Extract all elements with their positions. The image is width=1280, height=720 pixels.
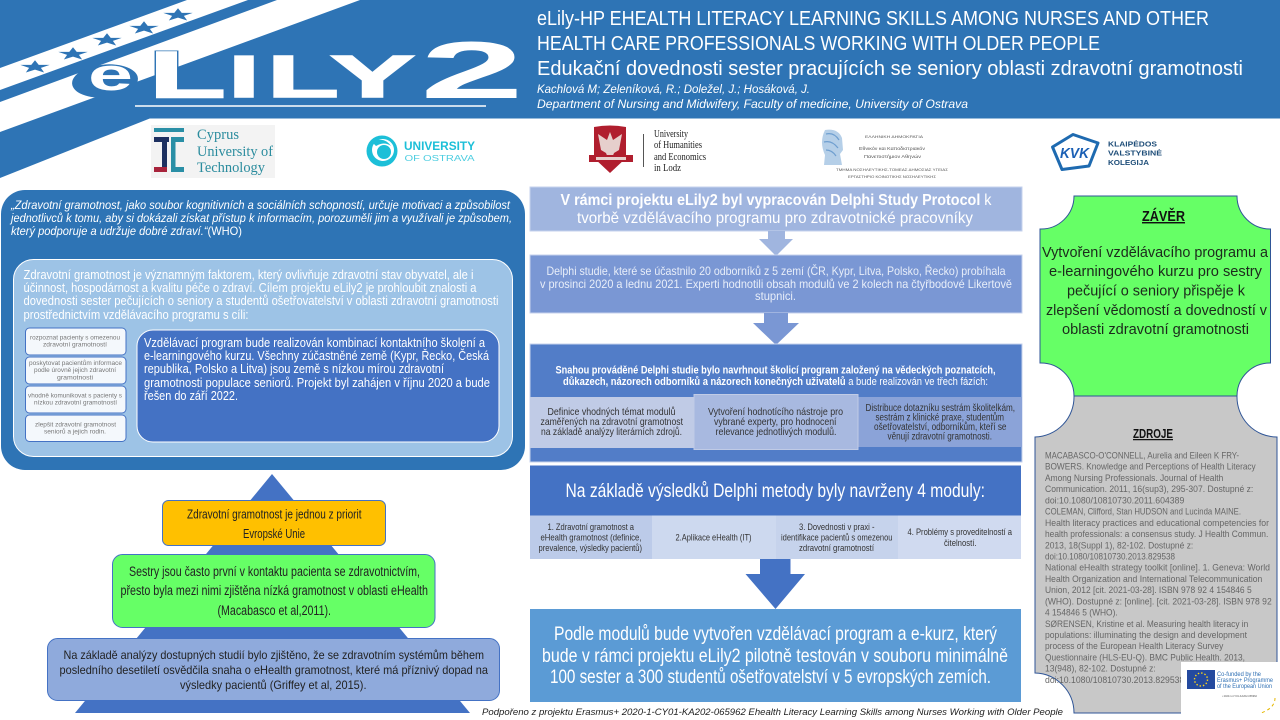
wordmark: L bbox=[267, 44, 339, 110]
pyramid level: nurses: (Macabasco et al,2011). bbox=[218, 603, 331, 618]
programme description: e-learningového kurzu. Všechny zúčastněné země (Kypr, Řecko, Česká bbox=[144, 348, 489, 363]
goal box 4: seniorů a jejich rodin. bbox=[44, 428, 106, 436]
phase 2 bbox=[694, 394, 858, 450]
panel: pilot testing: bude v rámci projektu eLily2 pilotně testován v souboru minimálně bbox=[542, 645, 1008, 667]
logo: Erasmus+ co-funding: of the European Union bbox=[1217, 683, 1272, 690]
module 3: 3. Dovednosti v praxi - bbox=[799, 522, 874, 533]
phase 3 bbox=[858, 397, 1022, 447]
phase 1: Definice vhodných témat modulů bbox=[548, 406, 676, 418]
title block: HEALTH CARE PROFESSIONALS WORKING WITH OLDER PEOPLE bbox=[537, 33, 1100, 55]
goal box 3: vhodně komunikovat s pacienty s bbox=[28, 392, 123, 400]
logo: Erasmus+ co-funding bbox=[1181, 662, 1280, 714]
module 1: 1. Zdravotní gramotnost a bbox=[548, 522, 635, 533]
logo: University of Ostrava: OF OSTRAVA bbox=[404, 154, 475, 163]
programme description: gramotnosti populace seniorů. Projekt byl zahájen v říjnu 2020 a bude bbox=[144, 376, 490, 390]
panel: project aims bbox=[14, 260, 512, 456]
references list: populations: illuminating the design and development bbox=[1045, 630, 1247, 641]
module 2 bbox=[652, 516, 776, 559]
panel: training programme phases bbox=[530, 344, 1022, 462]
panel: four modules: Na základě výsledků Delphi metody byly navrženy 4 moduly: bbox=[566, 480, 985, 502]
logo: National and Kapodistrian University of Athens: Πανεπιστήμιον Αθηνών bbox=[864, 153, 922, 159]
WHO quote bbox=[9, 198, 512, 238]
logo: National and Kapodistrian University of Athens: Εθνικόν και Καποδιστριακόν bbox=[859, 145, 926, 151]
references list: Union, 2012 [cit. 2021-03-28]. ISBN 978 92 4 154846 5 bbox=[1045, 585, 1252, 596]
aims text: prostřednictvím vzdělávacího programu s cíli: bbox=[24, 308, 248, 322]
logo: KVK Klaipedos valstybine kolegija: VALSTYBINĖ bbox=[1108, 148, 1162, 158]
panel: Delphi protocol: V rámci projektu eLily2 byl vypracován Delphi Study Protocol k bbox=[560, 192, 992, 209]
references list: doi:10.1080/10810730.2011.604389 bbox=[1045, 495, 1184, 506]
references list: 2013, 18(Suppl 1), 82-102. Dostupné z: bbox=[1045, 540, 1193, 551]
logo: University of Humanities and Economics in Lodz: and Economics bbox=[654, 151, 706, 163]
programme description: republika, Polsko a Litva) jsou země s nízkou mírou zdravotní bbox=[144, 362, 444, 376]
panel: pilot testing bbox=[530, 609, 1021, 702]
references list: Communication. 2011, 16(sup3), 295-307. Dostupné z: bbox=[1045, 484, 1253, 495]
phase 1 bbox=[530, 397, 694, 448]
logo: KVK Klaipedos valstybine kolegija: KVK bbox=[1060, 145, 1090, 162]
panel: Delphi protocol: tvorbě vzdělávacího programu pro zdravotnické pracovníky bbox=[577, 210, 973, 227]
references list: MACABASCO-O'CONNELL, Aurelia and Eileen K FRY- bbox=[1045, 450, 1239, 462]
programme description: řešen do září 2022. bbox=[144, 389, 238, 403]
wordmark: L bbox=[149, 38, 226, 112]
panel: pilot testing: 100 sester a 300 studentů ošetřovatelství v 5 evropských zemích. bbox=[550, 666, 991, 688]
panel: Delphi study: stupnici. bbox=[755, 289, 796, 303]
references list: Health Organization and International Telecommunication bbox=[1045, 574, 1262, 585]
references list: 13(948), 82-102. Dostupné z: bbox=[1045, 664, 1156, 675]
programme description bbox=[137, 330, 499, 442]
aims text: Zdravotní gramotnost je významným faktorem, který ovlivňuje zdravotní stav obyvatel, ale i bbox=[24, 268, 474, 282]
references list: Among Nursing Professionals. Journal of Health bbox=[1045, 473, 1223, 484]
logo: KVK Klaipedos valstybine kolegija bbox=[1052, 134, 1162, 170]
references list: doi:10.1080/10810730.2013.829538 bbox=[1045, 675, 1184, 686]
programme description: Vzdělávací program bude realizován kombinací kontaktního školení a bbox=[144, 336, 485, 350]
arrow 3 bbox=[746, 559, 805, 609]
goal box 4 bbox=[26, 415, 126, 442]
icon: EU flag bbox=[1187, 670, 1215, 689]
references list: 4 154846 5 (WHO). bbox=[1045, 608, 1118, 619]
conclusion text: e-learningového kurzu pro sestry bbox=[1049, 263, 1262, 280]
WHO quote: jednotlivců k tomu, aby si dokázali získat přístup k informacím, porozuměli jim a využívali je způsobem, bbox=[9, 211, 512, 225]
logo: KVK Klaipedos valstybine kolegija: KLAIPĖDOS bbox=[1108, 140, 1157, 148]
pyramid bbox=[48, 474, 500, 713]
conclusion text: pečující o seniory přispěje k bbox=[1067, 282, 1245, 300]
references list: COLEMAN, Clifford, Stan HUDSON and Lucinda MAINE. bbox=[1045, 507, 1241, 518]
wordmark: Y bbox=[330, 44, 415, 110]
logo: Cyprus University of Technology: Technology bbox=[197, 160, 266, 176]
references list bbox=[1045, 450, 1272, 686]
module 1 bbox=[530, 516, 652, 559]
module 4: 4. Problémy s proveditelností a bbox=[908, 527, 1013, 538]
title block: Edukační dovednosti sester pracujících se seniory oblasti zdravotní gramotnosti bbox=[537, 58, 1243, 80]
module 4 bbox=[898, 516, 1021, 559]
phase 3: sestrám z klinické praxe, studentům bbox=[876, 412, 1004, 424]
icon: five stars bbox=[20, 8, 193, 73]
logo: National and Kapodistrian University of Athens: ΕΛΛΗΝΙΚΗ ΔΗΜΟΚΡΑΤΙΑ bbox=[865, 135, 924, 139]
logo: Erasmus+ co-funding: Co-funded by the bbox=[1217, 671, 1262, 678]
logo: University of Humanities and Economics in Lodz: in Lodz bbox=[654, 162, 681, 174]
logo: National and Kapodistrian University of Athens: ΤΜΗΜΑ ΝΟΣΗΛΕΥΤΙΚΗΣ-ΤΟΜΕΑΣ ΔΗΜΟΣΙΑΣ ΥΓΕΙΑΣ bbox=[836, 167, 949, 172]
panel: training programme phases: důkazech, názorech odborníků a názorech konečných uživatelů a bude realizován ve třech fázích: bbox=[563, 376, 988, 388]
header banner bbox=[0, 0, 1280, 178]
phase 3: ošetřovatelství, odborníkům, kteří se bbox=[874, 421, 1007, 433]
conclusion heading: ZÁVĚR bbox=[1142, 207, 1185, 225]
pyramid level: analysis: výsledky pacientů (Griffey et al, 2015). bbox=[180, 678, 366, 692]
wordmark: e bbox=[88, 49, 133, 100]
panel: training programme phases: Snahou prováděné Delphi studie bylo navrhnout školicí program založený na vědeckých poznatcích, bbox=[556, 364, 996, 376]
eLily2 logo bbox=[0, 0, 524, 132]
logo: KVK Klaipedos valstybine kolegija: KOLEGIJA bbox=[1108, 158, 1150, 167]
module 2: 2.Aplikace eHealth (IT) bbox=[676, 532, 752, 544]
WHO quote: „Zdravotní gramotnost, jako soubor kognitivních a sociálních schopností, určuje motivaci a způsobilost bbox=[10, 198, 511, 212]
logo: University of Humanities and Economics in Lodz: University bbox=[654, 128, 688, 140]
goal box 1: zdravotní gramotností bbox=[43, 342, 107, 348]
pyramid level: nurses bbox=[112, 554, 435, 628]
phase 1: zaměřených na zdravotní gramotnost bbox=[540, 416, 683, 428]
pyramid level: analysis: Na základě analýzy dostupných studií bylo zjištěno, že se zdravotním systémům během bbox=[64, 648, 484, 662]
logo: University of Humanities and Economics in Lodz: of Humanities bbox=[654, 139, 702, 151]
pyramid level: EU priority bbox=[162, 500, 386, 546]
phase 1: na základě analýzy literárních zdrojů. bbox=[541, 426, 682, 438]
logo: National and Kapodistrian University of Athens: ΕΡΓΑΣΤΗΡΙΟ ΚΟΙΝΟΤΙΚΗΣ ΝΟΣΗΛΕΥΤΙΚΗΣ bbox=[848, 174, 937, 179]
panel: pilot testing: Podle modulů bude vytvořen vzdělávací program a e-kurz, který bbox=[554, 623, 997, 645]
panel: Delphi study: v prosinci 2020 a lednu 2021. Experti hodnotili obsah modulů ve 2 kolech na čtyřbodové Likertově bbox=[540, 277, 1012, 291]
phase 3: Distribuce dotazníku sestrám školitelkám, bbox=[866, 403, 1015, 414]
aims text: dovednosti sester pečujících o seniory a studentů ošetřovatelství v oblasti zdravotní gramotnosti bbox=[24, 294, 498, 308]
references list: Questionnaire (HLS-EU-Q). BMC Public Health. 2013, bbox=[1045, 652, 1245, 664]
goal box 3 bbox=[26, 386, 126, 413]
arrow 2 bbox=[753, 313, 799, 345]
conclusion text: zlepšení vědomostí a dovedností v bbox=[1046, 302, 1267, 319]
module 3: identifikace pacientů s omezenou bbox=[781, 532, 892, 544]
phase 2: relevance jednotlivých modulů. bbox=[716, 426, 836, 438]
logo: University of Humanities and Economics in Lodz bbox=[589, 126, 706, 174]
title block: Department of Nursing and Midwifery, Faculty of medicine, University of Ostrava bbox=[537, 99, 968, 111]
wordmark bbox=[88, 26, 524, 116]
goal box 3: nízkou zdravotní gramotností bbox=[34, 400, 117, 406]
arrow 1 bbox=[759, 231, 793, 256]
goal box 4: zlepšit zdravotní gramotnost bbox=[35, 422, 116, 428]
panel: Delphi study: Delphi studie, které se účastnilo 20 odborníků z 5 zemí (ČR, Kypr, Litva, Polsko, Řecko) probíhala bbox=[546, 263, 1006, 278]
phase 2: Vytvoření hodnotícího nástroje pro bbox=[708, 406, 843, 418]
conclusion text bbox=[1042, 244, 1269, 338]
conclusion text: oblasti zdravotní gramotnosti bbox=[1062, 321, 1249, 338]
panel: Delphi protocol bbox=[530, 187, 1022, 231]
panel: conclusion bbox=[1040, 196, 1270, 396]
module 3: zdravotní gramotností bbox=[799, 543, 874, 554]
logo: University of Ostrava bbox=[366, 136, 475, 166]
title block bbox=[537, 8, 1243, 111]
aims text: účinnost, hospodárnost a kvalitu péče o zdraví. Cílem projektu eLily2 je prohloubit znalosti a bbox=[24, 281, 477, 295]
panel: definition of health literacy bbox=[1, 190, 525, 470]
phase 3: věnují zdravotní gramotnosti. bbox=[888, 432, 992, 442]
module 1: prevalence, výsledky pacientů) bbox=[538, 543, 642, 554]
goal box 2 bbox=[26, 357, 126, 384]
title block: Kachlová M; Zeleníková, R.; Doležel, J.; Hosáková, J. bbox=[537, 84, 810, 96]
phase 2: vybrané experty, pro hodnocení bbox=[714, 416, 837, 428]
pyramid level: analysis: posledního desetiletí osvědčila snaha o eHealth gramotnost, které má příznivý dopad na bbox=[60, 663, 488, 677]
goal box 2: podle úrovně jejich zdravotní bbox=[34, 367, 116, 374]
logo: Cyprus University of Technology bbox=[151, 125, 275, 178]
pyramid level: EU priority: Evropské Unie bbox=[243, 527, 305, 541]
logo: Cyprus University of Technology: University of bbox=[197, 144, 273, 160]
goal box 2: poskytovat pacientům informace bbox=[29, 359, 122, 367]
footer acknowledgement: Podpořeno z projektu Erasmus+ 2020-1-CY01-KA202-065962 Ehealth Literacy Learning Skills among Nurses Working with Older People bbox=[482, 707, 1063, 718]
logo: University of Ostrava: UNIVERSITY bbox=[404, 139, 475, 153]
pyramid level: analysis bbox=[48, 638, 500, 700]
WHO quote: který podporuje a udržuje dobré zdraví.“(WHO) bbox=[11, 224, 242, 238]
logo: Erasmus+ co-funding: • 2020-1-CY01-KA202-065962 bbox=[1222, 694, 1257, 698]
logo: Cyprus University of Technology: Cyprus bbox=[197, 127, 239, 143]
panel: Delphi study bbox=[530, 255, 1022, 313]
references heading: ZDROJE bbox=[1133, 427, 1173, 441]
module 1: eHealth gramotnost (definice, bbox=[540, 532, 642, 544]
goal box 1: rozpoznat pacienty s omezenou bbox=[30, 334, 120, 342]
module 4: čitelností. bbox=[944, 538, 976, 549]
references list: SØRENSEN, Kristine et al. Measuring health literacy in bbox=[1045, 619, 1248, 630]
panel: four modules bbox=[530, 466, 1021, 559]
aims text bbox=[24, 268, 498, 322]
module 3 bbox=[776, 516, 898, 559]
logo: Erasmus+ co-funding: Erasmus+ Programme bbox=[1217, 677, 1273, 684]
title block: eLily-HP EHEALTH LITERACY LEARNING SKILLS AMONG NURSES AND OTHER bbox=[537, 8, 1209, 30]
panel: references bbox=[1035, 396, 1277, 713]
references list: doi:10.1080/10810730.2013.829538 bbox=[1045, 552, 1175, 562]
pyramid level: nurses: přesto byla mezi nimi zjištěna nízká gramotnost v oblasti eHealth bbox=[120, 583, 428, 598]
conclusion text: Vytvoření vzdělávacího programu a bbox=[1042, 244, 1269, 261]
goal box 1 bbox=[26, 328, 126, 355]
goal box 2: gramotnosti bbox=[57, 374, 93, 382]
references list: process of the European Health Literacy Survey bbox=[1045, 641, 1224, 652]
logo: National and Kapodistrian University of Athens bbox=[822, 130, 949, 179]
wordmark: 2 bbox=[420, 26, 524, 116]
wordmark: L bbox=[149, 38, 226, 112]
pyramid level: EU priority: Zdravotní gramotnost je jednou z priorit bbox=[187, 508, 362, 522]
wordmark: I bbox=[228, 44, 260, 110]
pyramid level: nurses: Sestry jsou často první v kontaktu pacienta se zdravotnictvím, bbox=[129, 564, 420, 579]
